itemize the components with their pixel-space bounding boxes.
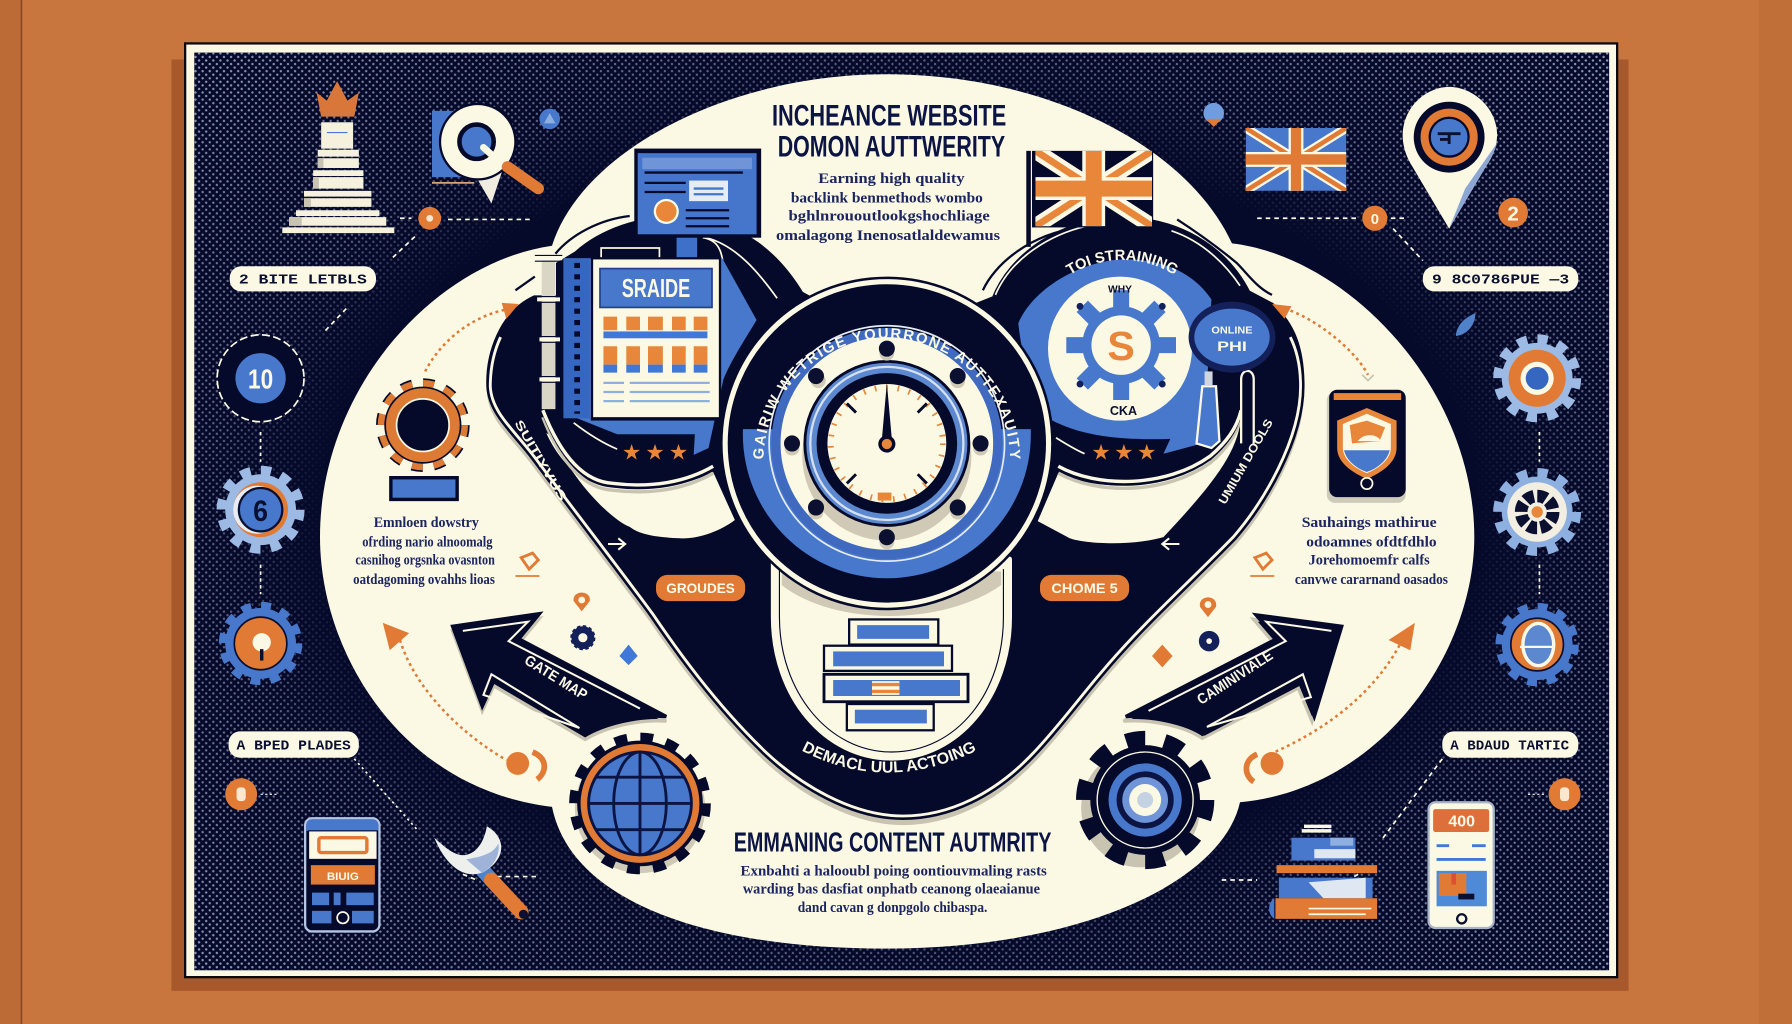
text block: right: canvwe cararnand oasados — [1295, 572, 1448, 588]
panel: cream cloud — [320, 74, 1474, 949]
icon: centre flag — [1029, 151, 1153, 247]
icon: binder spine — [535, 255, 590, 418]
orange pill right — [1040, 575, 1129, 601]
big arrow left: GATE MAP — [521, 653, 590, 704]
text block: left: casnihog orgsnka ovasnton — [355, 553, 495, 569]
gear: right top — [1498, 339, 1576, 417]
gear: right bottom — [1499, 607, 1575, 682]
text block: left — [353, 515, 495, 588]
text block: bottom: dand cavan g donpgolo chibaspa. — [798, 900, 987, 916]
icon: magnifier — [1189, 302, 1275, 448]
right circle: blue gear dial: TOI STRAINING — [1065, 250, 1178, 274]
icon: mobile app — [305, 818, 379, 931]
text block: right: odoamnes ofdtfdhlo — [1306, 534, 1437, 550]
icon: small web page — [634, 149, 761, 257]
left circle: blue panel and stars — [563, 258, 757, 464]
right lens — [1038, 410, 1241, 543]
icon: blue dots — [539, 103, 1475, 336]
icon: books — [1269, 826, 1377, 919]
icon: document SRAIDE: SRAIDE — [622, 273, 690, 303]
icon: mobile app: BIUIG — [327, 871, 359, 883]
badge: 10 — [217, 335, 304, 422]
orange badge right: 0 — [1371, 212, 1379, 228]
gear: 6: 6 — [253, 495, 268, 528]
left circle: blue panel and stars: ★★★ — [622, 439, 692, 464]
orange badge — [418, 207, 441, 230]
orange badge lower right — [1528, 778, 1581, 810]
pill: brand tactic: A BDAUD TARTIC — [1450, 740, 1569, 755]
centre gauge: GAIRIW WETRIGE YOURRONE AUTTEXAUITY — [753, 328, 1020, 459]
big arrow right — [1123, 615, 1342, 738]
text block: left: ofrding nario alnoomalg — [362, 534, 493, 550]
icon: map pin — [1403, 87, 1497, 229]
icon: phone 400: 400 — [1448, 813, 1475, 830]
connectors: dashed lines — [261, 218, 1539, 880]
orange badge two — [1498, 198, 1528, 227]
right circle: blue gear dial: ★★★ — [1091, 439, 1160, 464]
dotted arrows — [400, 309, 1403, 760]
left lens — [543, 410, 735, 538]
text block: top — [776, 171, 1001, 244]
text block: top: Earning high quality — [818, 171, 965, 187]
tray with bars — [770, 556, 1013, 761]
text block: bottom: warding bas dasfiat onphatb ceanong olaeaianue — [743, 882, 1040, 898]
icon: crown tower — [282, 81, 394, 233]
poster frame — [184, 42, 1618, 978]
small icons left — [515, 553, 638, 665]
pill: top right — [1423, 266, 1578, 291]
title: DOMON AUTTWERITY — [778, 131, 1005, 164]
pill: speed places — [229, 731, 359, 758]
road labels — [478, 417, 1316, 816]
orange pill left — [656, 575, 745, 601]
icon: uk flag — [1246, 128, 1346, 191]
text block: top: omalagong Inenosatlaldewamus — [776, 228, 1001, 244]
icon: document SRAIDE — [591, 257, 721, 421]
big arrow left — [453, 614, 666, 739]
orange badge two: 2 — [1507, 203, 1519, 226]
badge: 10: 10 — [248, 364, 273, 395]
right circle: blue gear dial: CKA — [1110, 404, 1137, 418]
icon: globe gear — [575, 738, 705, 873]
orange numbers on cloud — [506, 752, 1283, 782]
icon: dark gear — [1081, 739, 1206, 867]
pill: speed places: A BPED PLADES — [237, 740, 351, 755]
heading: content authority: EMMANING CONTENT AUTMRITY — [734, 826, 1051, 857]
road labels: DEMACL UUL ACTOING — [802, 741, 976, 773]
icon: phone 400 — [1429, 802, 1494, 928]
pill: brand tactic — [1442, 731, 1578, 758]
icon: wrench — [434, 826, 528, 919]
pill: top right: 9 8C0786PUE —3 — [1432, 273, 1569, 288]
orange pill left: GROUDES — [666, 581, 735, 596]
road labels: UMIUM DOOLS — [1216, 417, 1276, 507]
small icons right — [1152, 553, 1274, 667]
gear: 6 — [222, 471, 299, 549]
gear: bulb — [223, 606, 298, 681]
pill: site labels: 2 BITE LETBLS — [239, 273, 367, 288]
icon: orange gear — [382, 384, 464, 501]
text block: top: bghlnrououtlookgshochliage — [789, 209, 990, 225]
icon: magnifier: ONLINE — [1211, 326, 1253, 337]
road labels: SUITIYVUS — [512, 417, 570, 504]
orange pill right: CHOME 5 — [1051, 581, 1118, 596]
title — [772, 100, 1006, 164]
right circle: blue gear dial: S — [1107, 323, 1135, 369]
icon: magnifier: PHI — [1217, 339, 1247, 354]
orange badge lower left — [225, 778, 279, 810]
arrowheads — [383, 303, 1415, 650]
text block: left: Emnloen dowstry — [374, 515, 479, 531]
text block: right — [1295, 515, 1448, 588]
right circle: blue gear dial: WHY — [1108, 285, 1132, 296]
pill: site labels — [230, 266, 376, 291]
text block: right: Jorehomoemfr calfs — [1309, 553, 1430, 569]
gear: right middle — [1498, 473, 1576, 551]
text block: left: oatdagoming ovahhs lioas — [353, 572, 495, 588]
title: INCHEANCE WEBSITE — [772, 100, 1006, 133]
orange badge right — [1362, 206, 1387, 231]
icon: phone shield — [1327, 390, 1406, 503]
centre gauge — [722, 276, 1052, 610]
text block: right: Sauhaings mathirue — [1302, 515, 1437, 531]
right circle: blue gear dial — [1018, 250, 1212, 464]
text block: bottom: Exnbahti a halooubl poing oontiouvmaling rasts — [741, 863, 1047, 879]
text block: top: backlink benmethods wombo — [791, 190, 983, 206]
text block: bottom — [741, 863, 1047, 916]
icon: search magnifier — [432, 103, 538, 203]
panel: central dark road — [490, 216, 1301, 822]
big arrow right: CAMINIVIALE — [1195, 648, 1276, 708]
